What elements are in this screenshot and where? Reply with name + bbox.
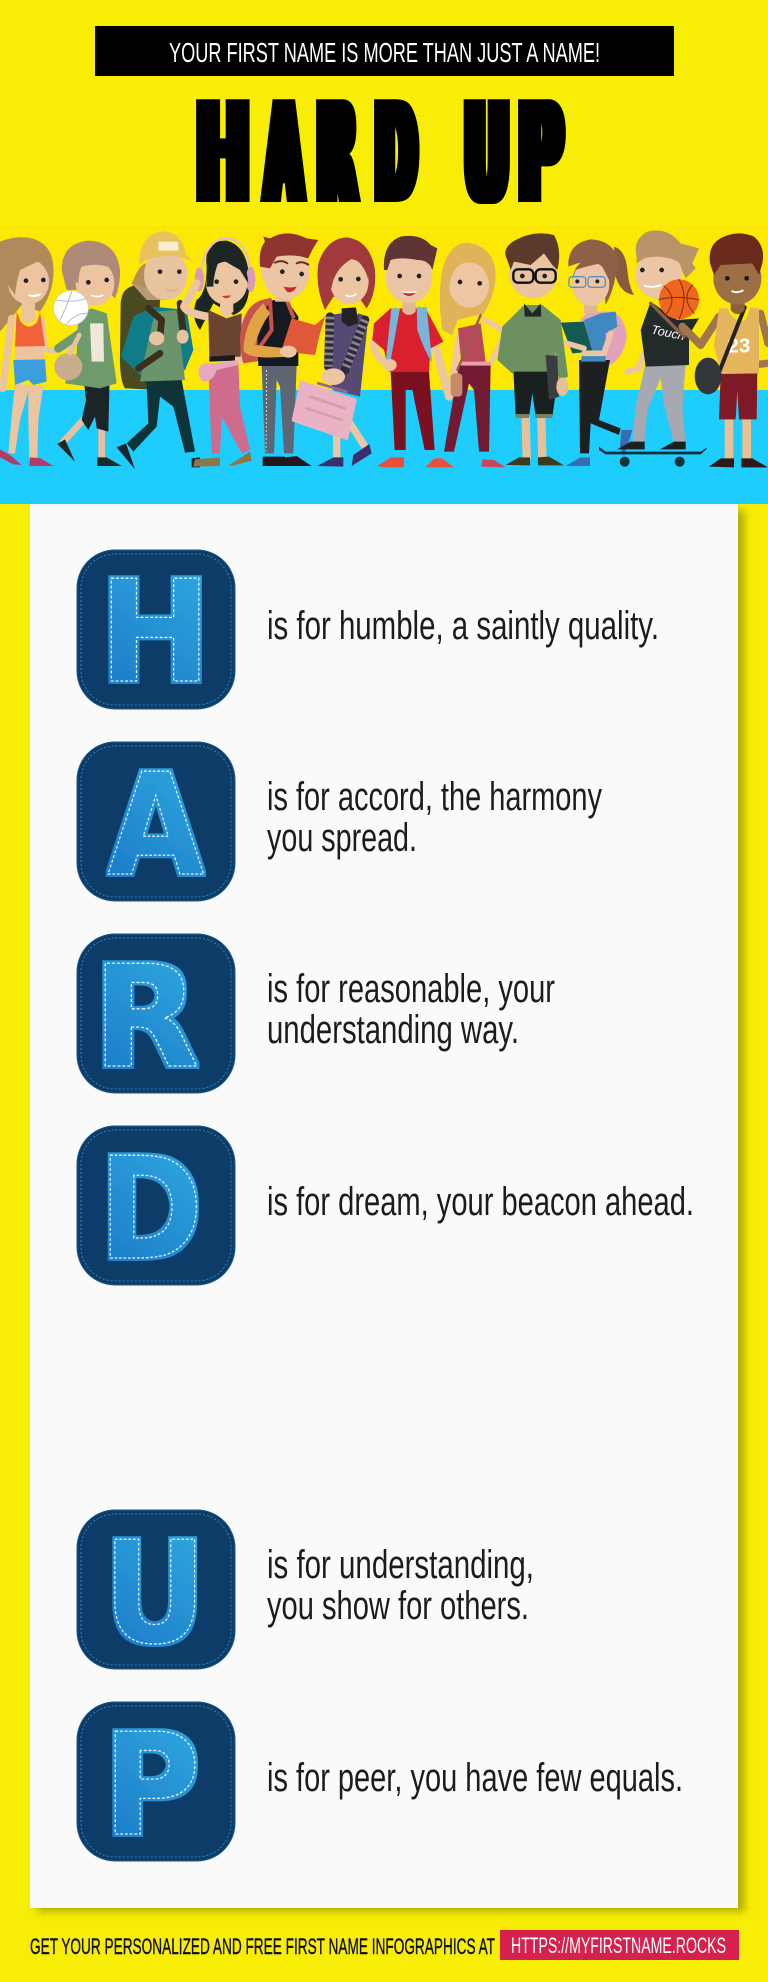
person: skateboarder: Touch <box>650 323 686 343</box>
title: R <box>318 71 356 235</box>
panel shadow <box>37 510 745 1912</box>
text: R lines: understanding way. <box>267 1008 519 1052</box>
person: girl in orange top <box>0 237 78 466</box>
text: A lines: is for accord, the harmony <box>267 775 602 819</box>
icon: letter D tile: D <box>99 1128 203 1292</box>
row U <box>77 1510 534 1676</box>
footer <box>30 1930 739 1960</box>
title <box>196 71 562 236</box>
header banner <box>95 26 674 76</box>
icon: letter U tile: U <box>103 1511 206 1676</box>
icon: letter R tile: R <box>92 936 199 1100</box>
person: girl with pink bag <box>293 237 375 467</box>
person: boy with glasses <box>497 233 568 465</box>
icon: letter H tile: H <box>99 551 211 715</box>
person: blonde girl <box>440 243 506 467</box>
title: H <box>196 72 249 236</box>
row R <box>77 934 555 1100</box>
icon: letter A tile: A <box>107 744 204 908</box>
title: U <box>465 73 509 236</box>
row P <box>77 1702 683 1868</box>
icon: letter A tile <box>77 742 235 908</box>
person: boy in basketball tank: 23 <box>727 335 750 358</box>
text: U lines: you show for others. <box>267 1584 529 1628</box>
icon: letter R tile: R <box>92 936 199 1100</box>
person: girl with headphones <box>184 238 255 467</box>
title: A <box>266 72 302 236</box>
icon: letter D tile: D <box>99 1128 203 1292</box>
person: girl with volleyball <box>54 241 122 466</box>
footer text: GET YOUR PERSONALIZED AND FREE FIRST NAME INFOGRAPHICS AT <box>30 1934 495 1959</box>
text: R lines <box>267 967 555 1052</box>
illustration: group of twelve students <box>0 231 768 469</box>
text: U lines: is for understanding, <box>267 1543 534 1587</box>
illustration: ground band <box>0 390 768 504</box>
title: D <box>376 71 416 235</box>
text: U lines <box>267 1543 534 1628</box>
text: A lines: you spread. <box>267 816 417 860</box>
icon: letter P tile: P <box>103 1704 200 1868</box>
icon: letter H tile: H <box>99 551 211 715</box>
row D <box>77 1126 694 1292</box>
text: A lines <box>267 775 602 860</box>
person: boy in basketball tank <box>659 233 768 467</box>
person: boy in red shirt <box>372 236 454 467</box>
icon: letter D tile <box>77 1126 235 1292</box>
row H <box>77 550 659 715</box>
text: R lines: is for reasonable, your <box>267 967 555 1011</box>
person: girl with ponytail and tablet <box>561 239 634 466</box>
icon: letter P tile: P <box>103 1704 200 1868</box>
person: hiker with cap and backpack <box>117 232 200 469</box>
person: boy with book <box>240 233 325 466</box>
icon: letter U tile: U <box>103 1511 206 1676</box>
person: skateboarder <box>599 231 707 467</box>
main white panel <box>30 504 738 1908</box>
icon: letter P tile <box>77 1702 235 1868</box>
icon: letter A tile: A <box>107 744 204 908</box>
title: P <box>519 72 562 236</box>
icon: letter U tile <box>77 1510 235 1676</box>
icon: letter R tile <box>77 934 235 1100</box>
row A <box>77 742 602 908</box>
